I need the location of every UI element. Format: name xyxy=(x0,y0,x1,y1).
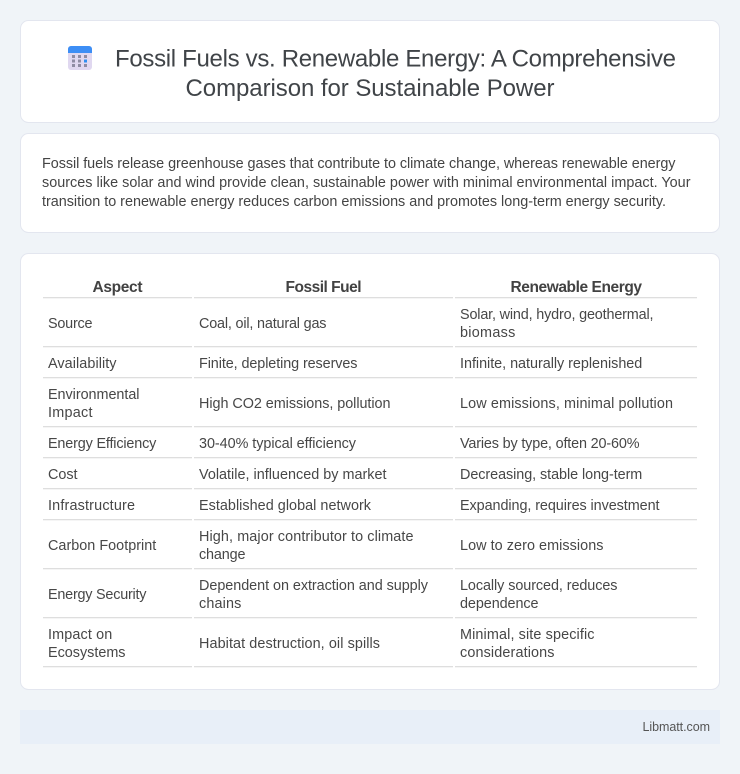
row: Environmental Impact: Impact xyxy=(48,405,92,421)
row: Energy Efficiency: 30-40% typical efficiency xyxy=(199,436,357,452)
title: Comparison for Sustainable Power xyxy=(186,75,554,102)
icon: calendar xyxy=(68,46,92,70)
row: Availability: Infinite, naturally replenished xyxy=(460,356,642,372)
row: Energy Security: Locally sourced, reduces xyxy=(460,578,618,594)
row: Impact on Ecosystems xyxy=(48,627,594,661)
footer xyxy=(20,710,720,744)
row: Impact on Ecosystems: Habitat destruction, oil spills xyxy=(199,636,380,652)
row: Energy Security: chains xyxy=(199,596,241,612)
table header xyxy=(92,279,642,296)
row: Availability: Finite, depleting reserves xyxy=(199,356,358,372)
panel: intro text: transition to renewable energy reduces carbon emissions and promotes long-term energy security. xyxy=(42,194,666,210)
row: Source: biomass xyxy=(460,325,515,341)
row: Energy Security: Energy Security xyxy=(48,587,147,603)
row: Energy Security: Dependent on extraction and supply xyxy=(199,578,429,594)
row: Infrastructure: Expanding, requires investment xyxy=(460,498,660,514)
row: Carbon Footprint: Carbon Footprint xyxy=(48,538,156,554)
table header: Fossil Fuel xyxy=(286,279,362,296)
row: Cost: Cost xyxy=(48,467,78,483)
row: Energy Efficiency: Energy Efficiency xyxy=(48,436,157,452)
row: Source: Solar, wind, hydro, geothermal, xyxy=(460,307,654,323)
row: Energy Efficiency: Varies by type, often 20-60% xyxy=(460,436,640,452)
row: Source: Coal, oil, natural gas xyxy=(199,316,326,332)
row: Infrastructure: Established global network xyxy=(199,498,372,514)
row: Availability xyxy=(48,356,642,372)
title: Fossil Fuels vs. Renewable Energy: A Comprehensive xyxy=(115,46,676,72)
row: Cost: Volatile, influenced by market xyxy=(199,467,386,483)
row: Source: Source xyxy=(48,316,92,332)
panel: title card xyxy=(20,20,720,122)
table header: Aspect xyxy=(92,279,142,296)
row: Environmental Impact: Environmental xyxy=(48,387,140,403)
row: Infrastructure: Infrastructure xyxy=(48,498,135,514)
row: Carbon Footprint xyxy=(48,529,604,563)
panel: comparison table xyxy=(20,254,720,690)
row: Environmental Impact: Low emissions, minimal pollution xyxy=(460,396,673,412)
panel: intro text xyxy=(20,134,720,232)
panel: intro text: sources like solar and wind provide clean, sustainable power with minimal environmental impact. Your xyxy=(42,175,691,191)
row: Impact on Ecosystems: considerations xyxy=(460,645,554,661)
row: Cost xyxy=(48,467,642,483)
row: Carbon Footprint: Low to zero emissions xyxy=(460,538,604,554)
row: Carbon Footprint: High, major contributor to climate xyxy=(199,529,414,545)
row: Energy Security: dependence xyxy=(460,596,538,612)
row: Energy Security xyxy=(48,578,618,612)
footer: Libmatt.com xyxy=(642,720,710,734)
row: Cost: Decreasing, stable long-term xyxy=(460,467,642,483)
table header: Renewable Energy xyxy=(510,279,642,296)
row: Environmental Impact xyxy=(48,387,673,421)
row: Availability: Availability xyxy=(48,356,117,372)
title xyxy=(115,46,676,102)
panel: intro text: Fossil fuels release greenhouse gases that contribute to climate change, whereas renewable energy xyxy=(42,156,676,172)
row: Source xyxy=(48,307,654,341)
row: Environmental Impact: High CO2 emissions, pollution xyxy=(199,396,390,412)
row: Carbon Footprint: change xyxy=(199,547,246,563)
row: Impact on Ecosystems: Impact on xyxy=(48,627,112,643)
row: Infrastructure xyxy=(48,498,660,514)
row: Impact on Ecosystems: Ecosystems xyxy=(48,645,126,661)
row: Energy Efficiency xyxy=(48,436,640,452)
row: Impact on Ecosystems: Minimal, site specific xyxy=(460,627,594,643)
